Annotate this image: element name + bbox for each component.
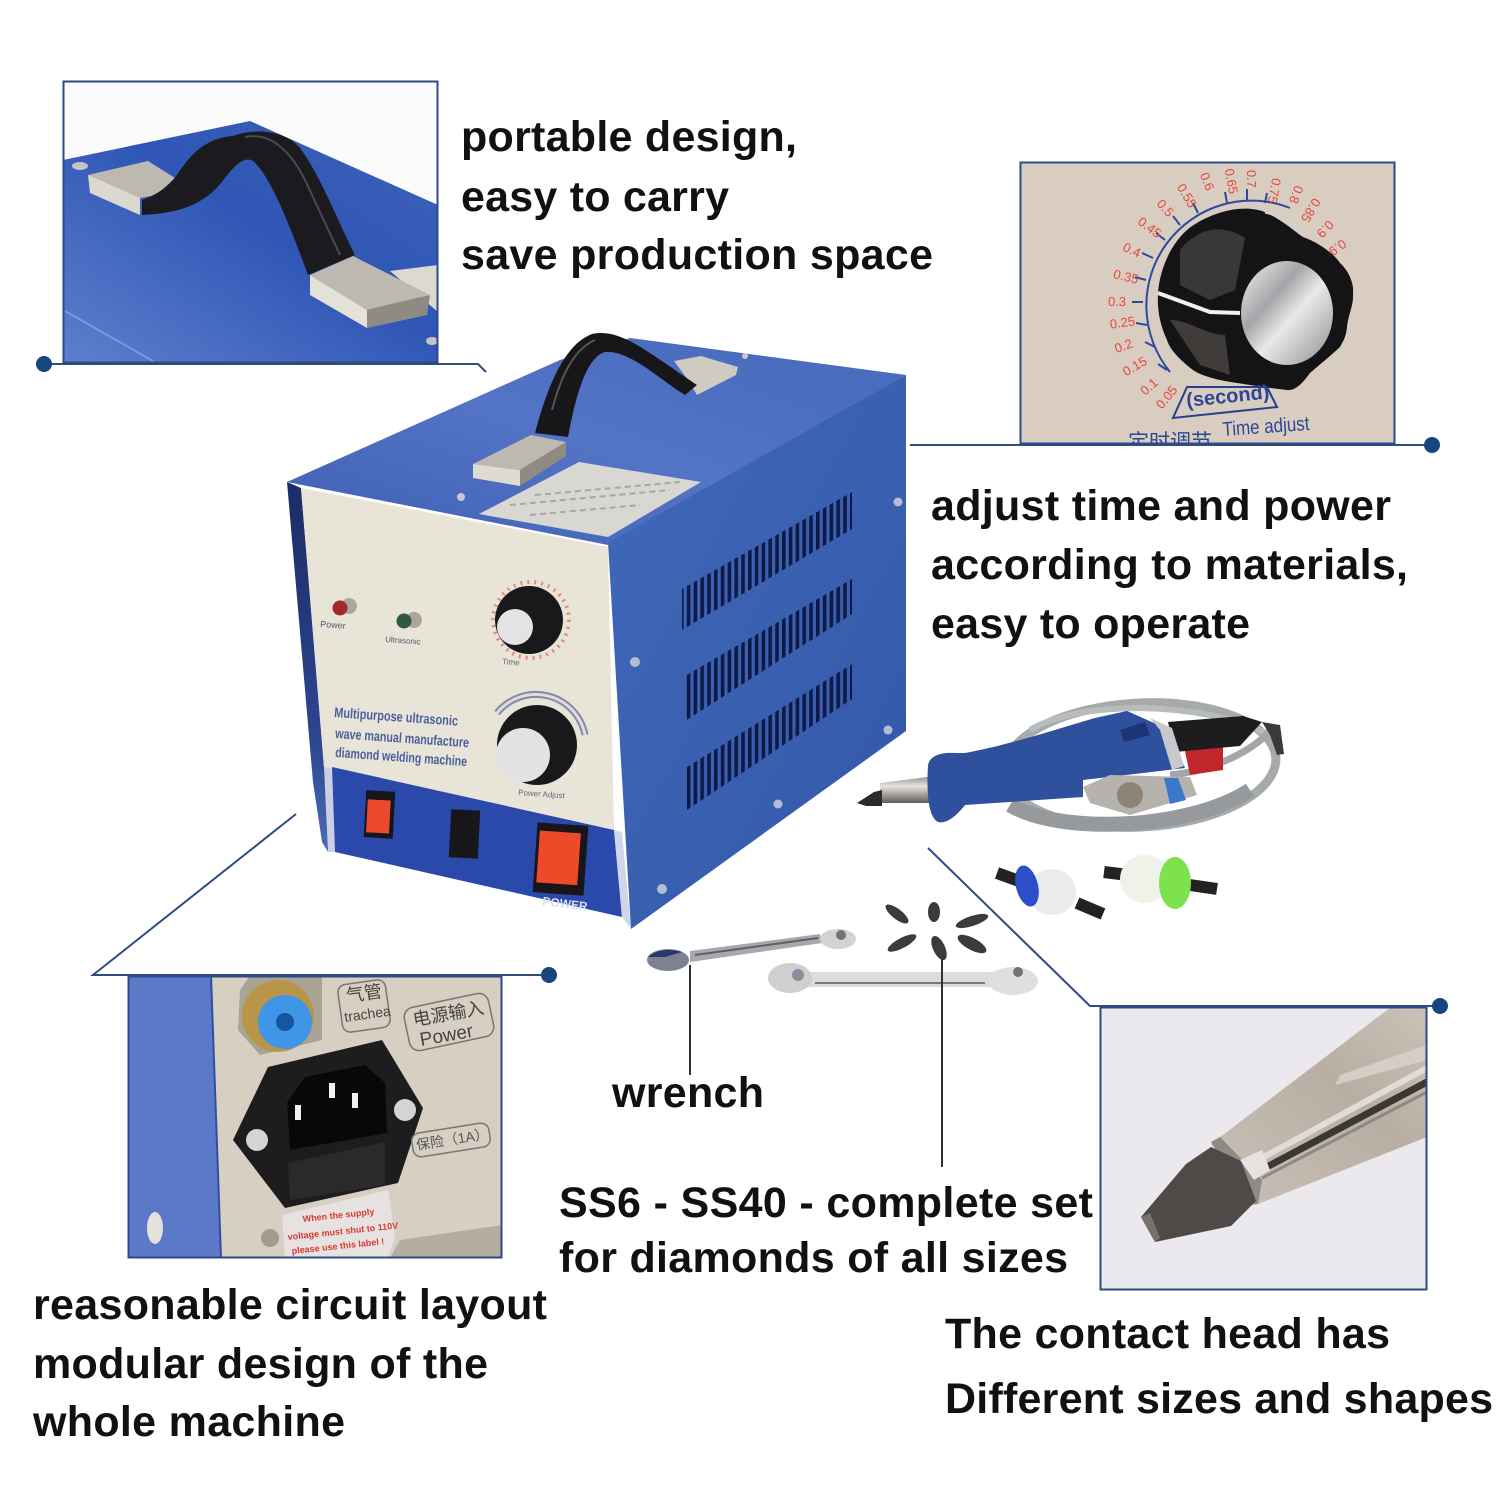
front label: Multipurpose ultrasonic (334, 704, 459, 729)
panel: time adjust dial photo: 定时调节 (1128, 431, 1212, 454)
handle (473, 333, 738, 486)
socket (233, 1040, 423, 1208)
wrenches (647, 929, 1038, 995)
contact tip (880, 775, 943, 803)
pen body (927, 711, 1185, 822)
dial numbers: 0.6 (1197, 170, 1217, 193)
text: SS6 - SS40: SS6 - SS40 - complete set (559, 1179, 1093, 1227)
panel: power socket photo: trachea (343, 1003, 392, 1025)
text: adjust time and power: easy to operate (931, 600, 1250, 648)
dial numbers: 0.85 (1298, 196, 1324, 225)
dial numbers: 0.45 (1135, 214, 1164, 241)
text: adjust time and power: according to materials, (931, 541, 1408, 589)
panel: power socket photo: voltage must shut to 110V (287, 1220, 399, 1242)
front label: diamond welding machine (335, 744, 468, 769)
panel: time adjust dial photo: (second) (1185, 381, 1270, 412)
front label (334, 704, 470, 769)
dial numbers: 0.9 (1314, 217, 1337, 241)
dial numbers: 0.65 (1222, 167, 1241, 195)
text: contact head (945, 1310, 1493, 1423)
text: portable design: save production space (461, 231, 933, 279)
text: reasonable circuit layout: reasonable circuit layout (33, 1281, 547, 1329)
power knob: Power Adjust (518, 788, 566, 800)
plug (1083, 775, 1197, 815)
dial numbers: 0.15 (1120, 353, 1149, 379)
indicator lights (320, 598, 422, 646)
dial numbers: 0.55 (1174, 181, 1200, 210)
dial numbers: 0.8 (1286, 183, 1306, 206)
text: reasonable circuit layout: modular design of the (33, 1340, 488, 1388)
text: portable design: portable design, (461, 113, 797, 161)
text: portable design: easy to carry (461, 173, 729, 221)
dial numbers (1108, 167, 1349, 412)
callout line: contact head (928, 848, 1448, 1014)
panel: power socket photo: 气管 (345, 981, 383, 1006)
text: reasonable circuit layout: whole machine (32, 1398, 345, 1446)
text: SS6 - SS40 (559, 1179, 1093, 1282)
indicator lights: Power (320, 619, 346, 631)
unit label (1173, 387, 1277, 418)
dial numbers: 0.75 (1265, 177, 1284, 205)
dial numbers: 0.7 (1244, 170, 1259, 188)
indicator lights: Ultrasonic (385, 635, 421, 646)
ultrasonic welding pen with cable (857, 696, 1284, 834)
dial numbers: 0.95 (1320, 236, 1349, 263)
panel: power socket photo: Power (418, 1021, 476, 1051)
dial numbers: 0.35 (1112, 266, 1140, 287)
warning sticker (282, 1190, 395, 1258)
text: adjust time and power: adjust time and power (931, 482, 1391, 530)
dial scale arc (1146, 201, 1290, 372)
top sticker (479, 462, 701, 537)
dial numbers: 0.5 (1154, 196, 1177, 220)
panel: contact head photo (1100, 1007, 1427, 1290)
leader lines: wrench and tips (690, 958, 942, 1167)
text: reasonable circuit layout (32, 1281, 547, 1446)
dial numbers: 0.4 (1121, 239, 1143, 261)
panel: time adjust dial photo (1020, 162, 1395, 454)
panel: power socket photo: When the supply (302, 1207, 375, 1224)
callout line: dial (910, 437, 1440, 453)
machine side with vents (608, 375, 906, 929)
text: contact head: Different sizes and shapes (945, 1375, 1493, 1423)
panel: portable handle photo (63, 81, 438, 363)
panel: power socket photo: 电源输入 (411, 998, 486, 1030)
dial numbers: 0.3 (1108, 294, 1126, 309)
switches: POWER (542, 894, 589, 914)
callout line: handle (36, 356, 486, 372)
front label: wave manual manufacture (334, 725, 470, 750)
text: adjust time and power (931, 482, 1408, 648)
text: SS6 - SS40: for diamonds of all sizes (559, 1234, 1068, 1282)
panel: time adjust dial photo: Time adjust (1222, 413, 1311, 441)
dial numbers: 0.05 (1153, 383, 1180, 412)
air filters (997, 855, 1217, 915)
dial numbers: 0.25 (1109, 313, 1136, 332)
dial numbers: 0.2 (1112, 336, 1135, 356)
main welding machine (287, 333, 906, 929)
panel: power socket photo: please use this label ! (291, 1236, 385, 1256)
panel: power socket photo: 保险（1A） (415, 1126, 490, 1153)
power knob (496, 694, 585, 800)
welding tips (883, 901, 990, 962)
text: contact head: The contact head has (945, 1310, 1390, 1358)
text: portable design (461, 113, 933, 279)
time knob (493, 582, 569, 668)
panel: power socket photo (128, 976, 502, 1258)
knob (1158, 209, 1353, 390)
bubble labels (337, 979, 391, 1033)
callout line: rear panel (93, 814, 557, 983)
dial numbers: 0.1 (1137, 375, 1161, 398)
label: wrench: wrench (611, 1069, 764, 1117)
time knob: Time (502, 657, 521, 668)
switches (364, 790, 589, 914)
machine top (287, 338, 906, 545)
machine front panel (287, 482, 631, 929)
